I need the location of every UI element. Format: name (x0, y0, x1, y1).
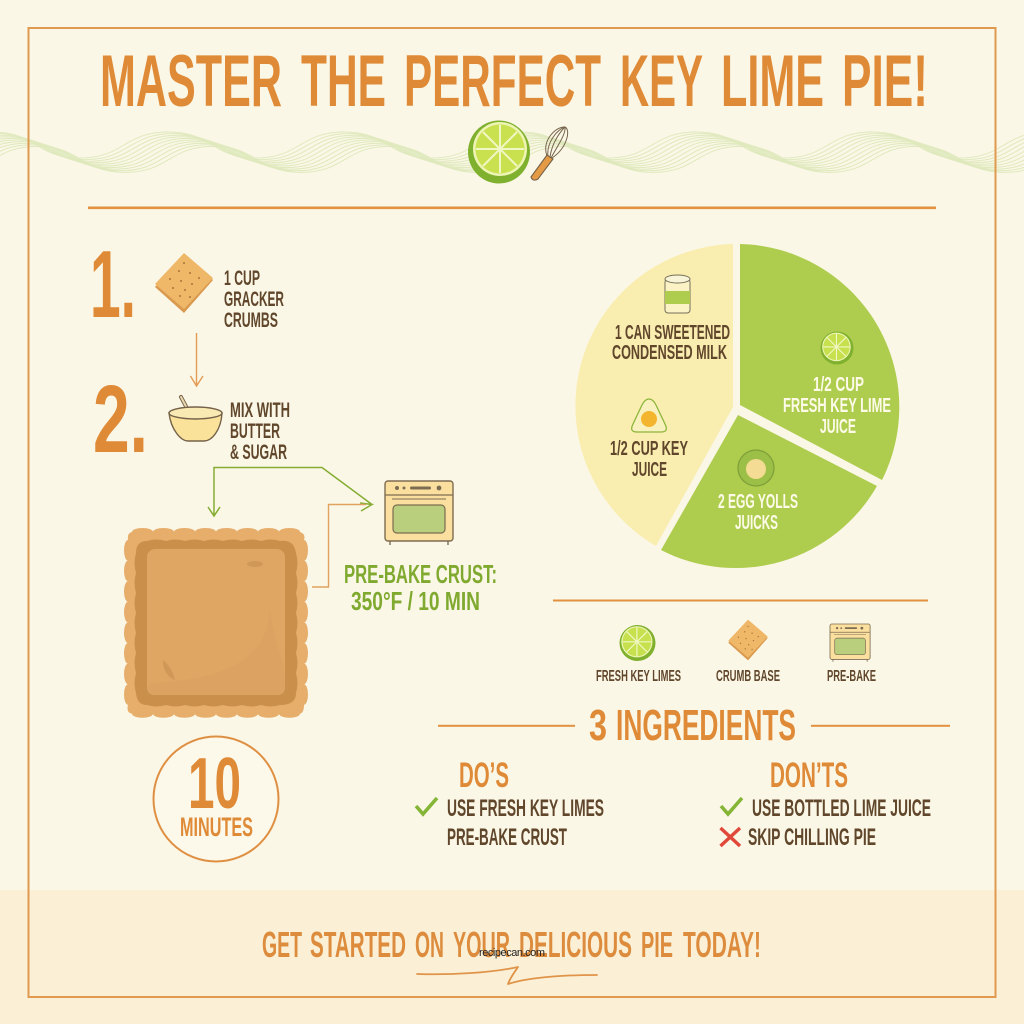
title: THE (301, 41, 386, 122)
label: condensed milk: 1 CAN SWEETENED (615, 322, 730, 344)
label: egg yolks: 2 EGG YOLLS (718, 491, 798, 513)
step 1 number: 1. (90, 231, 136, 338)
step 1 text: GRACKER (224, 288, 284, 311)
ingredients heading: 3 (589, 701, 607, 750)
step 2 text: MIX WITH (230, 399, 290, 422)
ingredients heading (438, 701, 950, 750)
do's heading: DO’S (459, 756, 509, 795)
step 2 number: 2. (93, 366, 148, 473)
do item 2: PRE-BAKE CRUST (447, 824, 567, 851)
call to action: DELICIOUS (519, 924, 632, 965)
title: PIE! (842, 41, 928, 122)
title: PERFECT (404, 41, 601, 122)
panel: don'ts (720, 756, 931, 851)
call to action: YOUR (453, 924, 510, 965)
step 1 (90, 231, 284, 338)
do item 1: USE FRESH KEY LIMES (447, 795, 604, 822)
icon: lime on pie (820, 332, 854, 364)
title: KEY (620, 41, 703, 122)
label: lime juice: JUICE (820, 416, 856, 438)
icon: mixing bowl (169, 397, 222, 441)
divider under pie (553, 600, 928, 602)
label: lime juice: 1/2 CUP (813, 374, 864, 396)
pre-bake label: 350°F / 10 MIN (351, 586, 480, 616)
call to action: PIE (641, 924, 673, 965)
call to action: STARTED (310, 924, 406, 965)
watermark: recipecan.com (479, 947, 545, 959)
step 1 text (224, 267, 284, 332)
icon: oven (385, 481, 453, 545)
timer badge (154, 736, 278, 862)
label: condensed milk: CONDENSED MILK (612, 342, 727, 364)
arrow: green connector to crust and oven (208, 468, 372, 516)
label: egg yolks: JUICKS (735, 512, 778, 534)
step 2 (93, 366, 290, 473)
slice: egg yolks (661, 415, 877, 568)
label: egg yolks (718, 491, 798, 534)
step 2 text: BUTTER (230, 420, 280, 443)
icon: check (416, 798, 437, 814)
squiggle underline (417, 967, 597, 984)
pie chart (575, 244, 899, 568)
panel: do's (416, 756, 604, 851)
call to action: GET (262, 924, 302, 965)
call to action (262, 924, 761, 965)
icon: whisk (531, 127, 568, 180)
label: lime juice: FRESH KEY LIME (783, 395, 891, 417)
label: condensed milk (612, 322, 730, 364)
label: lime juice (783, 374, 891, 438)
slice: condensed milk and key juice (575, 244, 733, 546)
title: LIME (721, 41, 824, 122)
label: key juice: 1/2 CUP KEY (610, 438, 688, 460)
pie crust illustration (124, 528, 308, 718)
slice: key lime juice (740, 244, 899, 480)
legend: pre-bake: PRE-BAKE (827, 668, 876, 685)
step 2 text: & SUGAR (230, 441, 287, 464)
pre-bake label (344, 559, 497, 616)
header divider (88, 206, 936, 209)
label: key juice: JUICE (632, 459, 667, 481)
legend: crumb base: CRUMB BASE (716, 668, 780, 685)
step 2 text (230, 399, 290, 464)
don't item 2: SKIP CHILLING PIE (748, 824, 876, 851)
legend: fresh key limes (596, 625, 681, 685)
icon: check (721, 798, 742, 814)
legend: fresh key limes: FRESH KEY LIMES (596, 668, 681, 685)
icon: egg yolk circle (738, 450, 774, 486)
ingredients heading: INGREDIENTS (616, 701, 796, 750)
title (100, 41, 928, 122)
arrow: orange connector crust to oven (312, 504, 366, 587)
call to action: TODAY! (683, 924, 761, 965)
icon: egg on triangle (632, 399, 666, 432)
step 1 text: CRUMBS (224, 309, 278, 332)
pre-bake label: PRE-BAKE CRUST: (344, 559, 497, 589)
title: MASTER (100, 41, 282, 122)
call to action: ON (415, 924, 444, 965)
arrow: step 1 to step 2 (190, 333, 203, 386)
icon: cracker (155, 253, 213, 313)
timer number: 10 (188, 744, 241, 824)
don'ts heading: DON’TS (770, 756, 848, 795)
legend: pre-bake (827, 624, 876, 685)
timer unit: MINUTES (180, 812, 253, 842)
icon: can (665, 275, 690, 313)
icon: lime slice (468, 120, 530, 184)
step 1 text: 1 CUP (224, 267, 260, 290)
legend: crumb base (716, 620, 780, 685)
label: key juice (610, 438, 688, 481)
icon: cross (720, 828, 740, 846)
icon legend (596, 620, 876, 685)
footer band (0, 890, 1024, 1024)
